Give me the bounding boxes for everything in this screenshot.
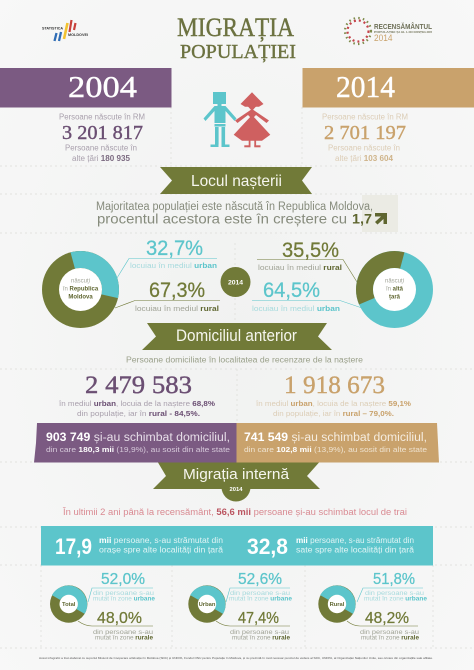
callout: 64,5% urban: 64,5% <box>263 279 320 302</box>
callout: 35,5% rural: 35,5% <box>282 239 339 262</box>
panel: 2014 <box>302 68 474 163</box>
callout: 48,0% rural: 48,0% <box>97 610 142 627</box>
donut: Urban: Urban <box>199 602 216 608</box>
ribbon: Domiciliul anterior: Domiciliul anterior <box>176 327 297 345</box>
stats 2014 <box>322 112 408 163</box>
icon: boy <box>204 92 236 147</box>
callout: 48,2% rural: 48,2% <box>365 610 409 627</box>
callout: 51,8% urban: 51,8% <box>373 571 415 588</box>
band: 741 549 changed domicile: din care 102,8 mii (13,9%), au sosit din alte state <box>244 445 427 454</box>
donut: born in another country <box>356 251 433 328</box>
text block: 56,6 mii persons moved: În ultimii 2 ani până la recensământ, 56,6 mii persoane și-au schimbat locul de trai <box>62 507 407 517</box>
callout: 48,0% rural <box>78 610 154 642</box>
donut label: născuți <box>71 278 90 284</box>
panel: Rural <box>318 571 428 642</box>
panel: Total <box>50 571 156 642</box>
donut label: în Republica <box>62 286 99 292</box>
stats 2014: Persoane născute în <box>328 144 400 152</box>
callout: 47,4% rural: 47,4% <box>238 610 279 627</box>
rural 35.5% arc <box>365 259 402 301</box>
stats 2004: alte țări 180 935 <box>72 154 131 163</box>
callout: 52,0% urban: din persoane s-au <box>93 590 154 597</box>
callout: 48,0% rural: din persoane s-au <box>93 629 153 636</box>
callout: 64,5% urban: locuiau în mediul urban <box>252 304 340 313</box>
stat: 1 918 673: din populație, iar în rural – 79,0%. <box>273 409 394 418</box>
stat: 2 479 583 <box>58 372 215 418</box>
title <box>177 13 296 63</box>
band: 903 749 changed domicile: din care 180,3 mii (19,9%), au sosit din alte state <box>46 445 230 454</box>
stats 2014: 2 701 197 <box>324 122 406 144</box>
icon: boy and girl <box>204 92 270 147</box>
callout: 47,4% rural <box>216 610 291 642</box>
stats 2004 <box>59 112 145 163</box>
ribbon: Domiciliul anterior <box>142 323 332 350</box>
stat: 2 479 583: în mediul urban, locuia de la naștere 68,8% <box>58 399 215 408</box>
band: 741 549 changed domicile <box>236 423 439 462</box>
callout: 67,3% rural: locuiau în mediul rural <box>135 304 219 313</box>
logo: Recensământul 2014 <box>345 18 433 44</box>
stats 2014: Persoane născute în RM <box>322 112 408 122</box>
urban 32.7% arc <box>73 259 110 296</box>
footnote: Acest infografic a fost elaborat cu suportul Misiunii de Cooperare al Elveției în Moldova (SDC) și UNFPA, Fondul ONU pentru Populație în Moldova, și nu prezintă în mod necesar punctul de vedere al SDC, UNFPA, al Organizației Națiunilor Unite, sau oricare din organizațiile sale afiliate. <box>39 656 433 660</box>
callout: 52,0% urban: mutat în zone urbane <box>93 596 156 602</box>
logo: Recensământul 2014: POPULAȚIEI ȘI AL LOCUINȚELOR <box>374 30 433 34</box>
badge: 2014 <box>220 267 250 297</box>
year band 2004: 2004 <box>68 69 138 104</box>
donut: Total: Total <box>62 602 76 608</box>
icon: up-right arrow <box>375 213 387 224</box>
donut label: în altă <box>385 286 404 292</box>
stats 2004: 3 201 817 <box>62 122 143 144</box>
stats 2004: Persoane născute în RM <box>59 112 145 122</box>
ribbon: Locul nașterii <box>160 167 312 194</box>
donut label <box>62 278 99 300</box>
text block: majority statement <box>96 201 373 226</box>
stat: 17,9: orașe spre alte localități din țară <box>99 546 224 554</box>
logo: Recensământul 2014: 2014 <box>374 33 392 43</box>
stats 2004: Persoane născute în <box>65 144 137 152</box>
callout: 67,3% rural: 67,3% <box>149 279 205 302</box>
panel: Urban <box>188 571 293 642</box>
ribbon: Locul nașterii: Locul nașterii <box>191 173 282 190</box>
logo: Recensământul 2014: RECENSĂMÂNTUL <box>374 22 432 31</box>
callout: 48,2% rural: din persoane s-au <box>360 629 419 636</box>
band: 741 549 changed domicile: 741 549 și-au schimbat domiciliul, <box>244 432 427 444</box>
ribbon: Migrația internă 2014: Migrația internă <box>183 466 290 483</box>
text block: majority statement: procentul acestora este în creștere cu <box>97 210 347 226</box>
year band 2014 <box>302 68 474 108</box>
callout: 52,0% urban: 52,0% <box>101 571 145 588</box>
year band 2004 <box>0 68 172 108</box>
stat: 2 479 583: din populație, iar în rural - 84,5%. <box>77 409 200 418</box>
logo: Statistica Moldovei: MOLDOVEI <box>68 33 88 37</box>
callout: 51,8% urban <box>357 571 428 602</box>
ribbon: Migrația internă 2014 <box>153 462 320 502</box>
callout: 52,6% urban: 52,6% <box>238 571 282 588</box>
stat: 32,8: sate spre alte localități din țară <box>296 546 415 554</box>
stats 2014: alte țări 103 604 <box>335 154 394 163</box>
callout: 47,4% rural: mutat în zone rurale <box>232 634 291 642</box>
band: internal movers <box>41 526 433 566</box>
decorative box behind arrow <box>362 195 398 232</box>
donut label: țară <box>389 294 401 300</box>
donut label: Moldova <box>68 294 93 300</box>
ribbon: Migrația internă 2014: 2014 <box>230 487 243 493</box>
year band 2014: 2014 <box>336 69 395 104</box>
callout: 52,6% urban: din persoane s-au <box>230 590 290 597</box>
callout: 47,4% rural: din persoane s-au <box>230 629 289 636</box>
icon: girl <box>234 92 270 147</box>
callout: 64,5% urban <box>252 279 362 313</box>
callout: 35,5% rural <box>257 239 357 282</box>
callout: 51,8% urban: mutat în zone urbane <box>364 596 428 602</box>
badge: 2014: 2014 <box>228 280 243 286</box>
donut label <box>385 278 404 300</box>
stat: 1 918 673: 1 918 673 <box>284 372 385 399</box>
stat: 1 918 673 <box>255 372 411 418</box>
title: MIGRAȚIA <box>177 13 294 42</box>
stat: 1 918 673: în mediul urban, locuia de la naștere 59,1% <box>255 399 411 408</box>
callout: 32,7% urban <box>117 237 217 278</box>
title: POPULAȚIEI <box>180 41 296 63</box>
stat: 32,8 <box>247 534 415 559</box>
stat: 2 479 583: 2 479 583 <box>85 372 192 399</box>
callout: 32,7% urban: locuiau în mediul urban <box>130 261 217 270</box>
stat: 32,8: 32,8 <box>247 534 288 559</box>
stat: 17,9: mii persoane, s-au strămutat din <box>99 536 223 545</box>
callout: 52,0% urban <box>88 571 156 602</box>
text block: majority statement: 1,7 <box>352 212 372 226</box>
band: 903 749 changed domicile: 903 749 și-au schimbat domiciliul, <box>46 432 230 444</box>
callout: 51,8% urban: din persoane s-au <box>365 590 424 597</box>
stat: 17,9 <box>55 534 224 559</box>
text block: persons domiciled since birth: Persoane domiciliate în localitatea de recenzare de la naștere <box>126 356 364 364</box>
callout: 48,2% rural: mutat în zone rurale <box>361 634 420 642</box>
text block: majority statement: Majoritatea populației este născută în Republica Moldova, <box>96 201 373 213</box>
callout: 48,0% rural: mutat în zone rurale <box>95 634 154 642</box>
band: 903 749 changed domicile <box>34 423 236 462</box>
panel: 2004 <box>0 68 172 163</box>
callout: 67,3% rural <box>115 279 220 313</box>
donut: Rural: Rural <box>330 602 345 608</box>
logo: Statistica Moldovei: STATISTICA <box>42 26 64 30</box>
callout: 52,6% urban <box>226 571 293 602</box>
stat: 17,9: 17,9 <box>55 534 92 559</box>
callout: 52,6% urban: mutat în zone urbane <box>229 596 293 602</box>
callout: 48,2% rural <box>347 610 420 642</box>
donut: born in Republica Moldova <box>42 251 119 328</box>
donut label: născuți <box>385 278 404 284</box>
stat: 32,8: mii persoane, s-au strămutat din <box>296 536 414 545</box>
logo: Statistica Moldovei <box>42 20 88 41</box>
callout: 32,7% urban: 32,7% <box>146 237 203 260</box>
callout: 35,5% rural: locuiau în mediul rural <box>258 263 342 272</box>
